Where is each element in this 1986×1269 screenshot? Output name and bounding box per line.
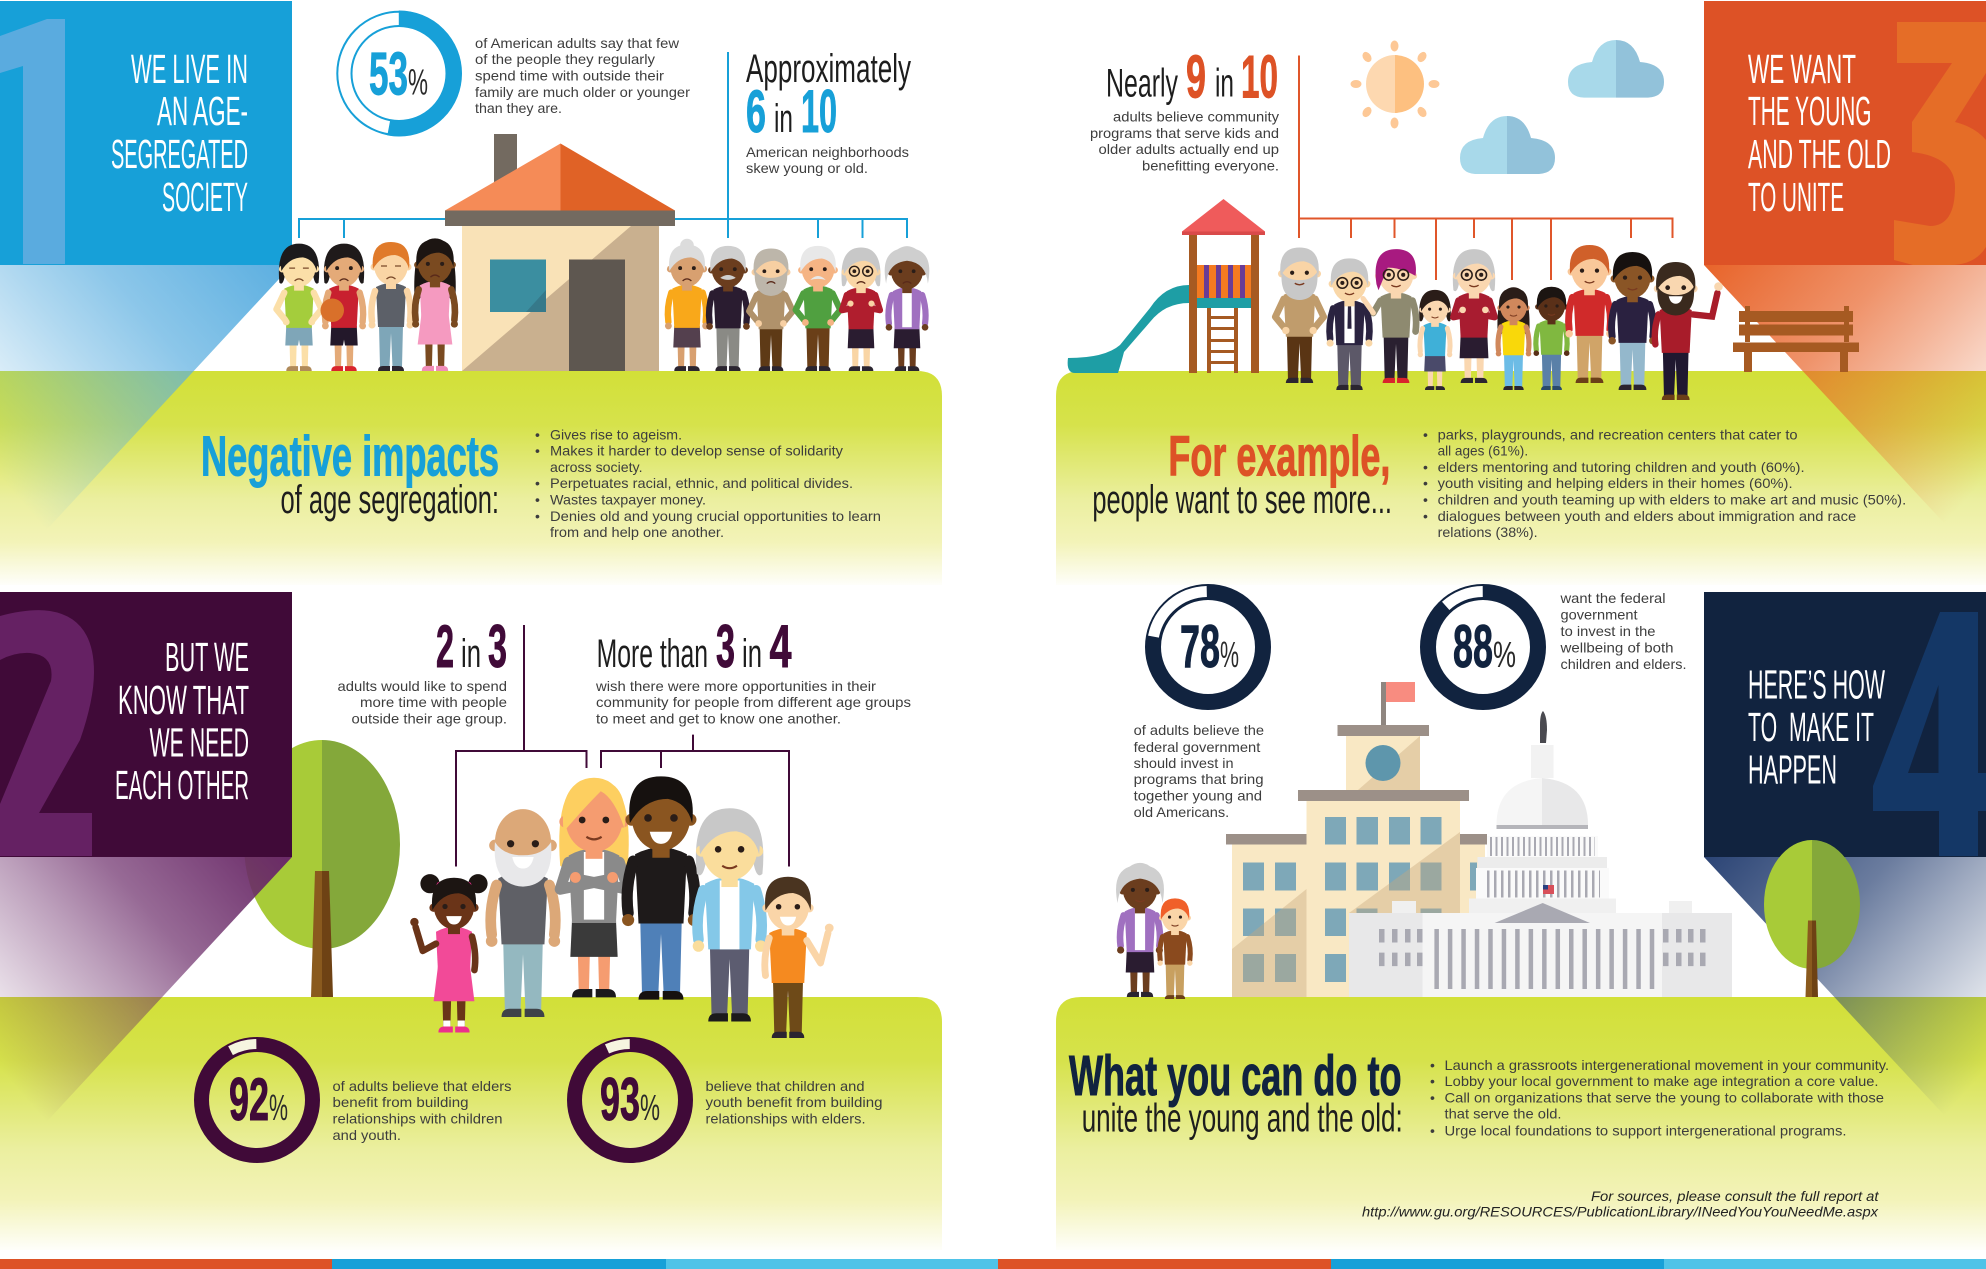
text: 92 percent description: benefit from building: [332, 1094, 468, 1110]
light beam: section 1: [0, 265, 292, 580]
list: what people want to see: youth visiting and helping elders in their homes (60%).: [1438, 475, 1793, 491]
people: older group: [665, 239, 929, 371]
light beam: section 2: [0, 857, 292, 1172]
person: boy in grey: [368, 242, 414, 371]
list: what people want to see: elders mentoring and tutoring children and youth (60%).: [1438, 459, 1805, 475]
stat: nearly 9 in 10: 9: [1186, 44, 1206, 111]
text: 53 percent description: than they are.: [475, 100, 562, 116]
stat: approximately 6 in 10: skew young or old.: [746, 160, 868, 176]
heading: negative impacts: of age segregation:: [280, 478, 499, 522]
person: boy in orange shirt: [762, 877, 834, 1038]
light beam: section 4: [1704, 857, 1986, 1160]
footer colour strip: [0, 1259, 1986, 1269]
stat: 2 in 3: outside their age group.: [352, 711, 507, 727]
list: what people want to see: parks, playgrounds, and recreation centers that cater to: [1438, 426, 1798, 442]
panel 2: but we know that we need each other: EACH OTHER: [115, 762, 249, 808]
heading: what you can do: What you can do to: [1069, 1044, 1402, 1108]
text: 92 percent description: of adults believe that elders: [332, 1078, 512, 1094]
list: what you can do: Call on organizations that serve the young to collaborate with those: [1444, 1089, 1884, 1105]
text: 53 percent description: [475, 35, 690, 116]
panel 2 heading: [115, 634, 249, 808]
text: 93 percent description: youth benefit from building: [706, 1094, 882, 1110]
connector lines: section 2: [456, 625, 789, 866]
green panel: what you can do: [1056, 997, 1986, 1250]
icon: cloud top: [1568, 40, 1664, 98]
heading: negative impacts: [201, 425, 499, 522]
panel 1: we live in an age-segregated society: [0, 1, 292, 265]
ring: 92 percent: [181, 1024, 333, 1176]
person: boy in green hoodie: [1534, 287, 1570, 390]
person: bearded older man: [1275, 248, 1324, 383]
list: negative impacts: •: [535, 426, 540, 442]
person: grandmother in purple: [1116, 863, 1164, 997]
list: what you can do: that serve the old.: [1444, 1106, 1562, 1122]
numeral 3: [1894, 22, 1986, 265]
list: what people want to see: •: [1423, 459, 1428, 475]
stat: approximately 6 in 10: American neighborhoods: [746, 144, 909, 160]
panel 4: here's how to make it happen: [1704, 592, 1986, 857]
heading: what you can do: [1069, 1044, 1403, 1140]
text: 92 percent description: [332, 1078, 512, 1143]
heading: for example: people want to see more...: [1092, 478, 1392, 522]
connector lines: section 1: [299, 52, 907, 238]
text: 53 percent description: of American adults say that few: [475, 35, 680, 51]
ring: 88 percent: [1405, 569, 1561, 725]
green panel: for example: [1056, 371, 1986, 585]
person: man in black sweater: [622, 776, 700, 1000]
heading: for example: [1092, 425, 1392, 522]
stat: nearly 9 in 10: in: [1215, 62, 1234, 106]
list: what people want to see: [1423, 426, 1906, 540]
list: negative impacts: Perpetuates racial, ethnic, and political divides.: [550, 475, 853, 491]
stat: nearly 9 in 10: benefitting everyone.: [1142, 157, 1279, 173]
list: negative impacts: Wastes taxpayer money.: [550, 492, 706, 508]
list: negative impacts: Gives rise to ageism.: [550, 426, 682, 442]
panel 4 heading: TO MAKE IT: [1748, 704, 1874, 750]
list: what people want to see: relations (38%).: [1438, 524, 1538, 540]
panel 4 heading: [1748, 662, 1885, 792]
icon: sun: [1350, 40, 1440, 128]
stat: more than 3 in 4: community for people from different age groups: [596, 694, 911, 710]
heading: for example: For example,: [1168, 425, 1390, 489]
text: 93 percent description: believe that children and: [706, 1078, 864, 1094]
list: what you can do: •: [1430, 1089, 1435, 1105]
stat: approximately 6 in 10: 10: [801, 78, 837, 145]
green panel: elders and children: [0, 997, 942, 1250]
person: bearded man waving: [1654, 262, 1723, 400]
text: 88 percent description: children and elders.: [1560, 656, 1686, 672]
ring: 88 percent: 88: [1453, 613, 1493, 680]
stat: approximately 6 in 10: 6: [746, 78, 766, 145]
person: boy with basketball: [320, 244, 366, 371]
list: what people want to see: dialogues between youth and elders about immigration and race: [1438, 508, 1856, 524]
ring: 78 percent: [1143, 582, 1273, 712]
list: what you can do: Lobby your local government to make age integration a core value.: [1444, 1073, 1878, 1089]
panel 1: we live in an age-segregated society: SEGREGATED: [111, 131, 248, 177]
list: negative impacts: Denies old and young crucial opportunities to learn: [550, 508, 881, 524]
ring: 53 percent: %: [408, 62, 428, 102]
stat: 2 in 3: [338, 613, 507, 727]
heading: negative impacts: Negative impacts: [201, 425, 499, 489]
person: girl in pink dress: [410, 874, 488, 1032]
panel 1: we live in an age-segregated society: SOCIETY: [162, 174, 248, 220]
icon: tree left: [244, 740, 400, 997]
text: 78 percent description: federal government: [1134, 739, 1260, 755]
text: 88 percent description: wellbeing of both: [1559, 640, 1674, 656]
text: 93 percent description: relationships with elders.: [706, 1110, 866, 1126]
text: sources: For sources, please consult the full report at: [1591, 1188, 1880, 1204]
stat: 2 in 3: 2: [436, 613, 454, 680]
person: woman with magenta hair: [1363, 249, 1417, 383]
ring: 53 percent: 53: [369, 40, 408, 108]
panel 2 heading: BUT WE: [165, 634, 249, 680]
person: girl in green: [276, 244, 322, 371]
person: man in navy: [1608, 252, 1657, 390]
list: what people want to see: •: [1423, 492, 1428, 508]
ring: 78 percent: %: [1220, 634, 1239, 675]
people: family group: [410, 776, 834, 1038]
list: negative impacts: •: [535, 492, 540, 508]
stat: approximately 6 in 10: in: [774, 97, 793, 141]
person: older man with white beard: [486, 809, 560, 1017]
text: 88 percent description: [1559, 590, 1686, 672]
numeral 2: [0, 610, 94, 856]
stat: nearly 9 in 10: older adults actually end up: [1098, 141, 1279, 157]
text: 78 percent description: programs that bring: [1134, 771, 1264, 787]
ring: 88 percent: %: [1493, 634, 1516, 675]
person: girl in pink: [412, 238, 458, 371]
icon: office building: [1226, 682, 1487, 997]
panel 1 heading: [111, 46, 248, 220]
list: what you can do: [1430, 1057, 1889, 1138]
person: man in dark sweater: [706, 246, 750, 371]
light beam: section 3: [1704, 265, 1986, 568]
list: what people want to see: •: [1423, 426, 1428, 442]
person: woman with glasses: [841, 248, 881, 371]
heading: what you can do: unite the young and the old:: [1082, 1096, 1403, 1140]
icon: bench: [1733, 306, 1859, 372]
people: grandmother and boy: [1116, 863, 1193, 999]
ring: 93 percent: %: [640, 1087, 660, 1128]
stat: more than 3 in 4: to meet and get to know one another.: [596, 711, 841, 727]
person: man in green: [796, 246, 840, 371]
ring: 53 percent: [337, 12, 461, 135]
person: blonde woman: [559, 778, 629, 997]
panel 2 heading: KNOW THAT: [118, 677, 249, 723]
text: sources: [1362, 1188, 1880, 1220]
icon: cloud lower: [1460, 116, 1555, 174]
panel 3 heading: WE WANT: [1748, 46, 1856, 92]
panel 4 heading: HAPPEN: [1748, 746, 1837, 792]
stat: 2 in 3: adults would like to spend: [338, 678, 507, 694]
people: young group: [276, 238, 458, 371]
list: negative impacts: •: [535, 442, 540, 458]
panel 1 heading: WE LIVE IN: [131, 46, 248, 92]
text: 53 percent description: spend time with outside their: [475, 68, 664, 84]
list: what you can do: Launch a grassroots intergenerational movement in your community.: [1444, 1057, 1889, 1073]
stat: nearly 9 in 10: Nearly: [1106, 62, 1178, 106]
text: 88 percent description: government: [1560, 606, 1638, 622]
text: sources: http://www.gu.org/RESOURCES/PublicationLibrary/INeedYouYouNeedMe.aspx: [1362, 1204, 1879, 1220]
panel 1 heading: AN AGE-: [157, 88, 248, 134]
icon: tree right: [1764, 840, 1860, 997]
text: 78 percent description: [1134, 722, 1264, 820]
stat: more than 3 in 4: More than: [597, 632, 708, 676]
list: what you can do: •: [1430, 1057, 1435, 1073]
people: mixed ages group: [1275, 245, 1723, 400]
ring: 92 percent: 92: [229, 1066, 269, 1133]
green panel: negative impacts: [0, 371, 942, 585]
text: 93 percent description: [706, 1078, 882, 1126]
list: negative impacts: [535, 426, 881, 540]
list: what people want to see: children and youth teaming up with elders to make art and music (50%).: [1438, 492, 1906, 508]
list: negative impacts: •: [535, 475, 540, 491]
numeral 1: [0, 19, 65, 264]
text: 78 percent description: together young and: [1134, 788, 1262, 804]
text: 78 percent description: should invest in: [1134, 755, 1234, 771]
text: 88 percent description: to invest in the: [1560, 623, 1656, 639]
stat: more than 3 in 4: in: [742, 632, 762, 676]
text: 88 percent description: want the federal: [1559, 590, 1666, 606]
panel 3 heading: TO UNITE: [1748, 174, 1844, 220]
text: 78 percent description: of adults believe the: [1134, 722, 1264, 738]
list: what people want to see: •: [1423, 475, 1428, 491]
stat: more than 3 in 4: 3: [716, 613, 735, 680]
text: 92 percent description: relationships with children: [332, 1110, 502, 1126]
person: woman in yellow: [665, 239, 709, 371]
person: bearded man in tan: [749, 248, 793, 371]
list: negative impacts: across society.: [550, 459, 642, 475]
person: woman in purple: [885, 246, 929, 371]
person: man in suit: [1327, 258, 1372, 390]
stat: more than 3 in 4: [595, 613, 911, 727]
list: what you can do: •: [1430, 1122, 1435, 1138]
list: what people want to see: all ages (61%).: [1438, 442, 1528, 458]
icon: playground: [1068, 199, 1265, 373]
panel 3 heading: [1748, 46, 1891, 220]
stat: 2 in 3: in: [461, 632, 481, 676]
stat: nearly 9 in 10: programs that serve kids and: [1090, 125, 1279, 141]
ring: 93 percent: [556, 1026, 704, 1174]
icon: capitol building: [1349, 711, 1732, 997]
list: negative impacts: from and help one another.: [550, 524, 724, 540]
stat: 2 in 3: 3: [488, 613, 507, 680]
stat: approximately 6 in 10: [746, 47, 911, 176]
person: man in red: [1565, 245, 1614, 383]
person: girl in blue: [1418, 290, 1452, 390]
text: 92 percent description: and youth.: [332, 1127, 401, 1143]
person: woman in maroon: [1453, 249, 1495, 383]
list: what you can do: •: [1430, 1073, 1435, 1089]
text: 53 percent description: of the people they regularly: [475, 51, 655, 67]
stat: more than 3 in 4: wish there were more opportunities in their: [595, 678, 876, 694]
icon: house: [445, 134, 675, 371]
list: what you can do: Urge local foundations to support intergenerational programs.: [1444, 1122, 1846, 1138]
panel 2: but we know that we need each other: [0, 592, 292, 857]
panel 2 heading: WE NEED: [150, 720, 249, 766]
person: boy in brown: [1157, 898, 1193, 999]
stat: 2 in 3: more time with people: [360, 694, 507, 710]
list: negative impacts: Makes it harder to develop sense of solidarity: [550, 442, 843, 458]
panel 3: we want the young and the old to unite: [1704, 1, 1986, 265]
stat: more than 3 in 4: 4: [770, 613, 792, 680]
list: what people want to see: •: [1423, 508, 1428, 524]
text: 53 percent description: family are much older or younger: [475, 84, 690, 100]
stat: approximately 6 in 10: Approximately: [746, 47, 911, 91]
ring: 93 percent: 93: [600, 1066, 640, 1133]
list: negative impacts: •: [535, 508, 540, 524]
stat: nearly 9 in 10: adults believe community: [1113, 109, 1279, 125]
stat: nearly 9 in 10: 10: [1241, 44, 1278, 111]
panel 3 heading: THE YOUNG: [1748, 88, 1872, 134]
ring: 78 percent: 78: [1180, 613, 1220, 680]
person: older woman in blue cardigan: [693, 808, 766, 1022]
numeral 4: [1873, 612, 1986, 856]
stat: nearly 9 in 10: [1090, 44, 1279, 173]
connector lines: section 3: [1299, 56, 1672, 280]
ring: 92 percent: %: [269, 1087, 288, 1128]
text: 78 percent description: old Americans.: [1134, 804, 1229, 820]
person: girl in yellow: [1496, 287, 1531, 390]
